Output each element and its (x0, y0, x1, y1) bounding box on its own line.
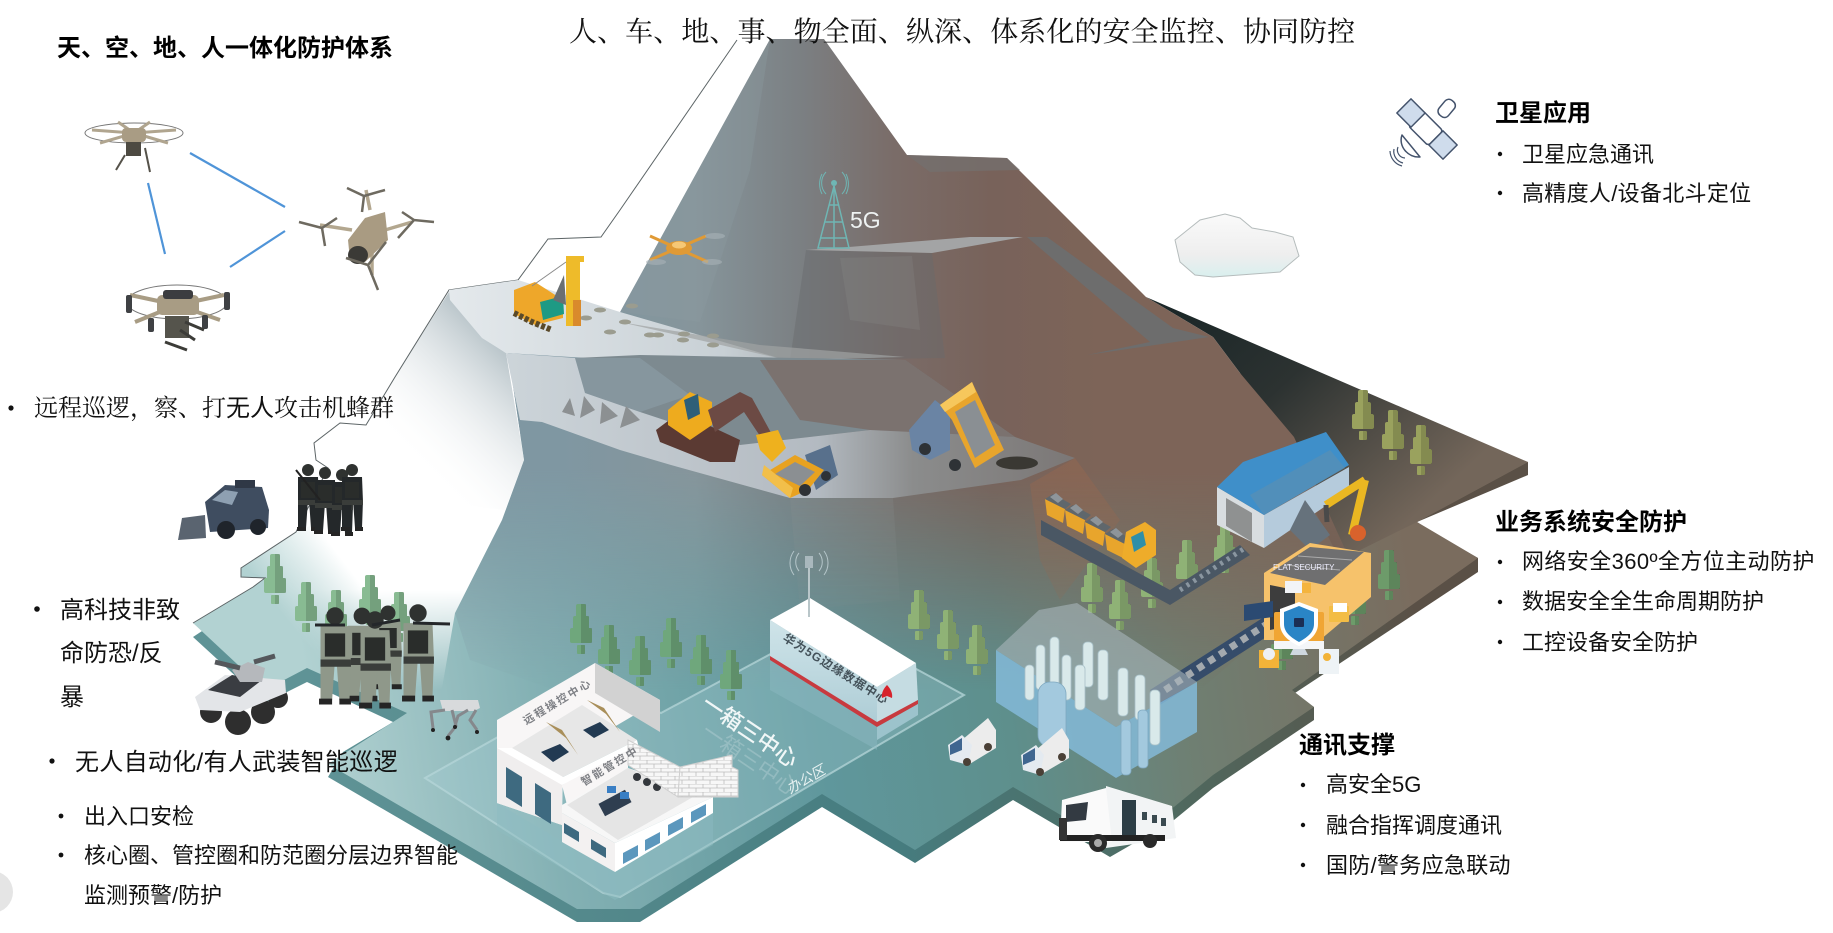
list: satellite applications: 卫星应急通讯 (1522, 142, 1654, 167)
upper terrace with drill holes (449, 280, 905, 362)
list: business system security: 数据安全全生命周期防护 (1522, 589, 1764, 614)
icon: hexacopter drone (85, 122, 183, 172)
list: checkpoints and perimeter: 核心圈、管控圈和防范圈分层边界智能 (84, 843, 458, 868)
icon: satellite (1390, 97, 1457, 166)
plaza zone (425, 622, 964, 897)
label: office zone: 办公区 (784, 761, 830, 797)
road spikes (562, 396, 640, 428)
icon: 5G tower: 5G (850, 207, 881, 233)
lower conveyor with rocks (1150, 610, 1285, 705)
list: checkpoints and perimeter (59, 804, 458, 908)
list: business system security: 网络安全360º全方位主动防护 (1522, 549, 1815, 574)
processing plant with solar roof (1264, 543, 1371, 640)
list: satellite applications (1498, 142, 1751, 206)
list: communications support (1301, 772, 1511, 878)
heading: communications support: 通讯支撑 (1299, 732, 1395, 759)
bottom-left page mark (0, 871, 13, 913)
list: communications support: 高安全5G (1326, 772, 1421, 797)
icon: armed soldiers group (315, 604, 450, 708)
factory (1217, 432, 1349, 550)
office building: 智能管控中 (578, 743, 641, 789)
list: communications support: 融合指挥调度通讯 (1326, 813, 1502, 838)
icon: 5G tower (818, 172, 881, 248)
list: satellite applications: 高精度人/设备北斗定位 (1522, 181, 1751, 206)
bullet: non-lethal anti-terror (34, 597, 180, 711)
list: checkpoints and perimeter: 出入口安检 (84, 804, 194, 829)
icon: armed octocopter drone (126, 285, 230, 350)
processing plant with solar roof: FLAT SECURITY (1273, 563, 1335, 572)
heading: air-ground integrated defence: 天、空、地、人一体化防护体系 (57, 35, 393, 62)
icon: tilt quad drone (299, 188, 434, 290)
bullet: remote drone swarm: 远程巡逻，察、打无人攻击机蜂群 (34, 395, 394, 422)
icon: robot dog (431, 700, 480, 740)
icon: drilling rig (514, 256, 584, 330)
dark back plate (1146, 297, 1528, 560)
5G edge data container (770, 551, 918, 750)
cloud (1175, 214, 1299, 277)
icon: security monitor and shield (1244, 581, 1349, 674)
list: business system security (1498, 549, 1815, 655)
cut wall above road (575, 355, 1015, 445)
label: one-box three-centers: 一箱三中心 (697, 718, 802, 801)
snow slope (193, 39, 770, 700)
icon: special forces squad (296, 464, 363, 536)
5G edge data container: 华为5G边缘数据中心 (780, 630, 892, 707)
office building: 远程操控中心 (520, 675, 594, 728)
icon: delivery vans (948, 718, 1069, 776)
trees (264, 390, 1432, 700)
list: checkpoints and perimeter: 监测预警/防护 (84, 883, 222, 908)
icon: survey quad drone (646, 233, 725, 265)
tank farm in transparent box (996, 603, 1197, 778)
mining road (506, 353, 1075, 498)
icon: mobile command vehicle (1059, 786, 1176, 852)
icon: tipping dump truck (909, 382, 1004, 471)
ore conveyor with carts (1041, 493, 1250, 605)
icon: armed patrol robot (195, 656, 288, 735)
mountain body (455, 39, 1350, 720)
bullet: non-lethal anti-terror: 暴 (60, 684, 84, 711)
icon: armored police vehicle (178, 480, 269, 540)
bullet: non-lethal anti-terror: 高科技非致 (60, 597, 180, 624)
icon: excavator (656, 392, 786, 462)
mine shaft hole (996, 456, 1038, 470)
mountain facets (620, 39, 1209, 610)
swarm links (148, 153, 285, 267)
bullet: unmanned and manned patrol: 无人自动化/有人武装智能巡逻 (75, 749, 398, 776)
robot arm (1326, 480, 1366, 541)
list: communications support: 国防/警务应急联动 (1326, 853, 1511, 878)
office building (497, 663, 738, 900)
bullet: non-lethal anti-terror: 命防恐/反 (60, 640, 163, 667)
title: 人、车、地、事、物全面、纵深、体系化的安全监控、协同防控 (569, 16, 1355, 48)
ground plate (193, 400, 1528, 909)
ground plate side edge (193, 462, 1528, 922)
heading: business system security: 业务系统安全防护 (1495, 509, 1687, 536)
list: business system security: 工控设备安全防护 (1522, 630, 1698, 655)
icon: loaded dump truck (762, 445, 838, 498)
label: one-box three-centers: 一箱三中心 (697, 690, 802, 773)
heading: satellite applications: 卫星应用 (1495, 100, 1591, 127)
